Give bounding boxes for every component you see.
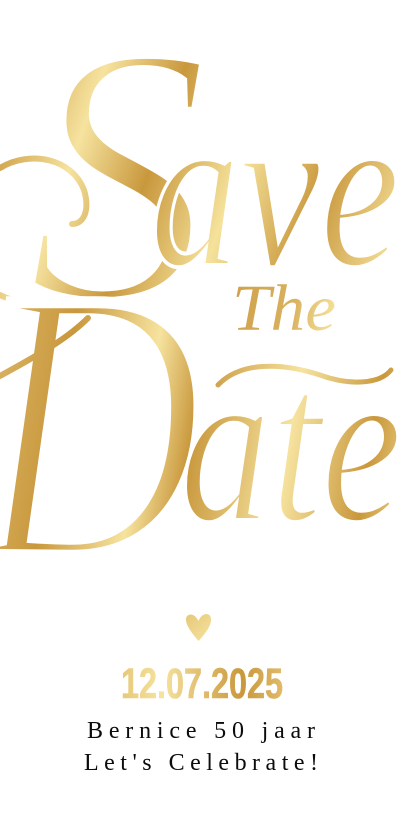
script title: Save [0, 0, 400, 378]
script title: Date [0, 212, 400, 639]
script title: The: The [232, 272, 336, 345]
text: name and age: Bernice 50 jaar [87, 718, 315, 744]
flourish: t crossbar [218, 366, 391, 385]
flourish: left entry stroke [0, 318, 88, 376]
flourish: lower loop [0, 295, 60, 305]
icon: heart [186, 614, 211, 641]
text: celebrate line: Let's Celebrate! [84, 750, 318, 776]
flourish: upper left swash [0, 159, 86, 224]
date: 12.07.2025 [121, 660, 283, 708]
